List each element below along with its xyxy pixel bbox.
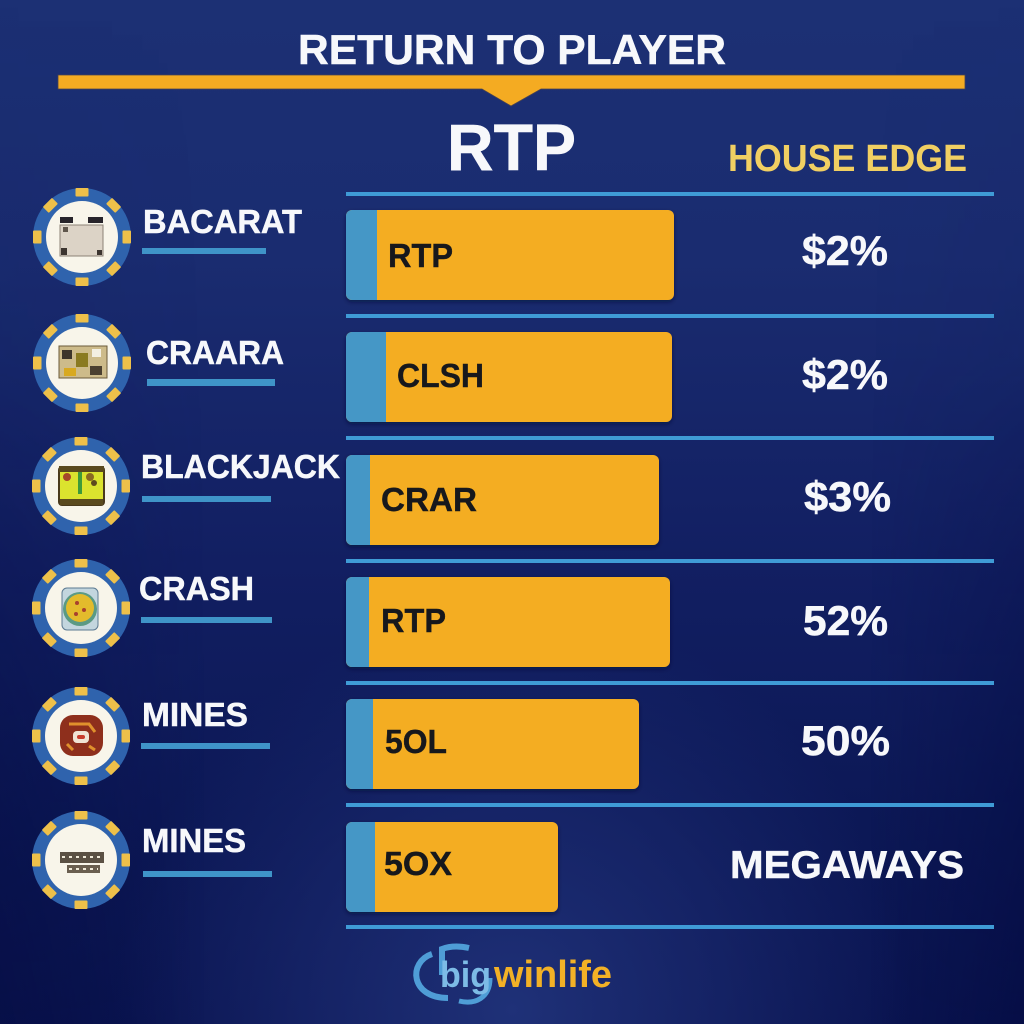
title banner with pointer [58, 75, 965, 106]
underline [147, 379, 275, 386]
house edge value: $3% [804, 473, 891, 520]
logo mark [416, 947, 490, 1002]
row: Blackjack [32, 437, 891, 545]
RTP bar [346, 210, 674, 300]
house edge value: MEGAWAYS [730, 844, 964, 887]
bar label: CRAR [381, 481, 477, 518]
label: BLACKJACK: BLACKJACK [141, 448, 340, 485]
title: RETURN TO PLAYER [298, 26, 726, 73]
icon: crash chip [32, 559, 130, 657]
house edge value: $2% [802, 227, 888, 274]
underline [142, 248, 266, 254]
bar label: RTP [388, 237, 453, 274]
RTP bar [346, 822, 558, 912]
RTP column heading: RTP [447, 110, 576, 184]
RTP bar [346, 577, 670, 667]
logo: bigwinlife [416, 947, 612, 1002]
logo text: winlife: winlife [493, 954, 612, 996]
underline [141, 743, 270, 749]
bar label: RTP [381, 602, 446, 639]
icon: bacarat chip [33, 188, 131, 286]
label: MINES: MINES [142, 822, 246, 859]
row: Mines second [32, 811, 964, 912]
icon: blackjack chip [32, 437, 130, 535]
house edge value: $2% [802, 351, 888, 398]
RTP bar [346, 332, 672, 422]
icon: megaways chip [32, 811, 130, 909]
label: CRASH: CRASH [139, 570, 254, 607]
RTP bar [346, 699, 639, 789]
house edge value: 50% [801, 717, 890, 764]
House edge column heading: HOUSE EDGE [728, 138, 967, 180]
row separators [346, 192, 994, 929]
row: Bacarat [33, 188, 888, 300]
bar label: 5OL [385, 723, 447, 760]
label: BACARAT: BACARAT [143, 203, 302, 240]
underline [143, 871, 272, 877]
icon: mines chip [32, 687, 130, 785]
row: Craara [33, 314, 888, 422]
icon: craara chip [33, 314, 131, 412]
RTP bar [346, 455, 659, 545]
bar label: 5OX [384, 845, 452, 882]
row: Mines [32, 687, 890, 789]
underline [142, 496, 271, 502]
label: MINES: MINES [142, 696, 248, 733]
house edge value: 52% [803, 597, 888, 644]
underline [141, 617, 272, 623]
row: Crash [32, 559, 888, 667]
label: CRAARA: CRAARA [146, 334, 284, 371]
logo text: big: big [440, 954, 491, 995]
bar label: CLSH [397, 357, 484, 394]
